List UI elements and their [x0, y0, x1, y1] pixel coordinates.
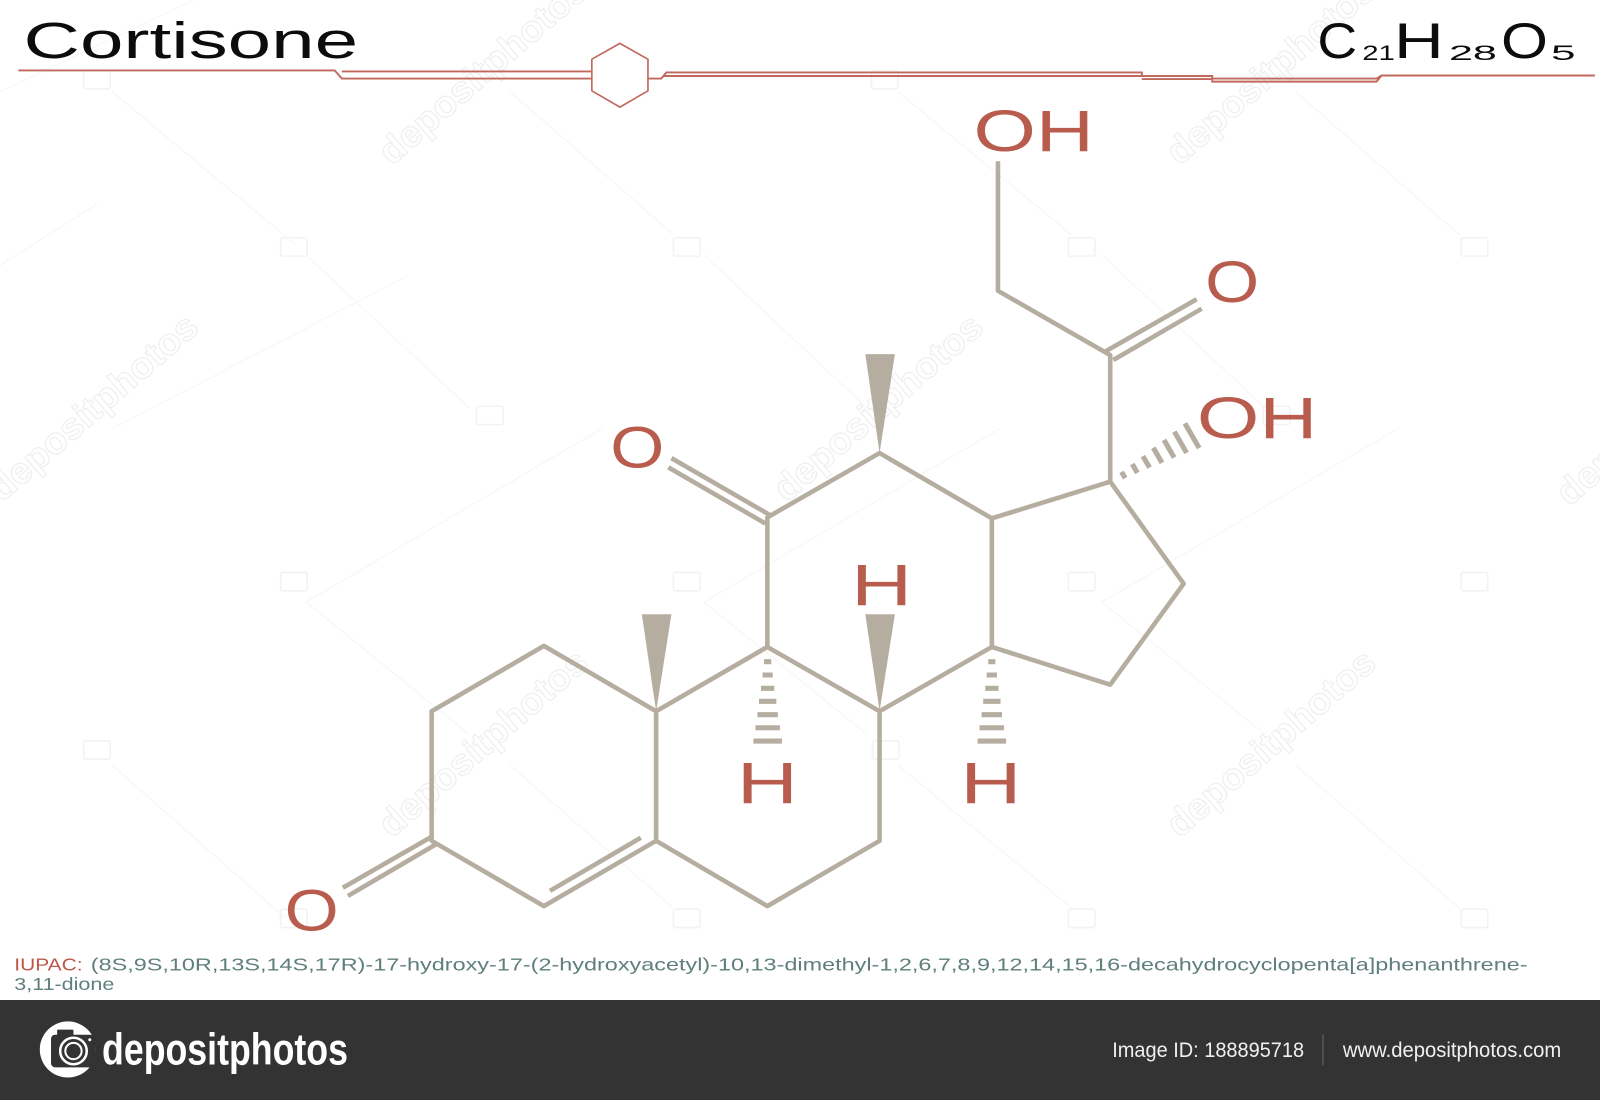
hashed bond: C14 hydrogen: [978, 662, 1006, 741]
atom label: H C14: H: [960, 751, 1021, 816]
hashed bond: C9 hydrogen: [753, 662, 782, 741]
molecule: cortisone skeletal structure: [285, 99, 1317, 944]
bond: ring A inner double bond: [550, 838, 641, 891]
chemical formula: O: [1501, 13, 1548, 69]
bonds: ring C: [767, 453, 992, 711]
atom label: H C9: H: [737, 751, 798, 816]
website url: www.depositphotos.com: [1342, 1038, 1561, 1062]
wedge: C10 methyl: [642, 614, 671, 711]
bond: C3 carbonyl double bond: [343, 837, 437, 896]
footer bar: [0, 1000, 1600, 1100]
atom label: O C3: O: [285, 879, 339, 944]
atom label: H C8: H: [851, 553, 912, 618]
atom label: O side chain: O: [1205, 250, 1259, 315]
logo wordmark: depositphotos: [102, 1023, 348, 1074]
IUPAC name text block: 3,11-dione: [14, 974, 114, 994]
icon: depositphotos camera logo: [40, 1021, 96, 1078]
text: depositphotos: [765, 305, 991, 509]
text: depositphotos: [370, 641, 596, 845]
IUPAC name text block: IUPAC:: [14, 954, 83, 974]
IUPAC name text block: [14, 954, 1528, 994]
title: Cortisone: Cortisone: [23, 12, 358, 69]
image ID: Image ID: 188895718: [1112, 1038, 1304, 1062]
atom label: OH top: OH: [973, 99, 1094, 164]
header circuit line with hexagon: [18, 43, 1595, 107]
hashed bond: C17 hydroxyl: [1122, 423, 1199, 478]
chemical formula: [1317, 13, 1576, 69]
bonds: side chain: [998, 161, 1110, 482]
bonds: ring B: [656, 647, 880, 906]
bonds: ring D: [992, 482, 1184, 685]
atom label: OH C17: OH: [1197, 386, 1317, 451]
wedge: C13 methyl: [865, 354, 895, 453]
chemical formula: H: [1394, 13, 1444, 69]
atom label: O C11: O: [610, 415, 664, 480]
chemical formula: 21: [1362, 41, 1395, 65]
wedge: C8 hydrogen: [865, 614, 895, 711]
chemical formula: 5: [1551, 41, 1576, 65]
bonds: ring A: [432, 646, 656, 906]
IUPAC name text block: (8S,9S,10R,13S,14S,17R)-17-hydroxy-17-(2-hydroxyacetyl)-10,13-dimethyl-1,2,6,7,8,9,12,14,15,16-decahydrocyclopenta[a]phenanthrene-: [91, 954, 1528, 974]
chemical formula: 28: [1449, 41, 1497, 65]
bond: side chain carbonyl double bond: [1105, 299, 1202, 360]
bond: C11 carbonyl double bond: [668, 458, 770, 523]
text: depositphotos: [1158, 641, 1384, 845]
chemical formula: C: [1317, 13, 1357, 69]
